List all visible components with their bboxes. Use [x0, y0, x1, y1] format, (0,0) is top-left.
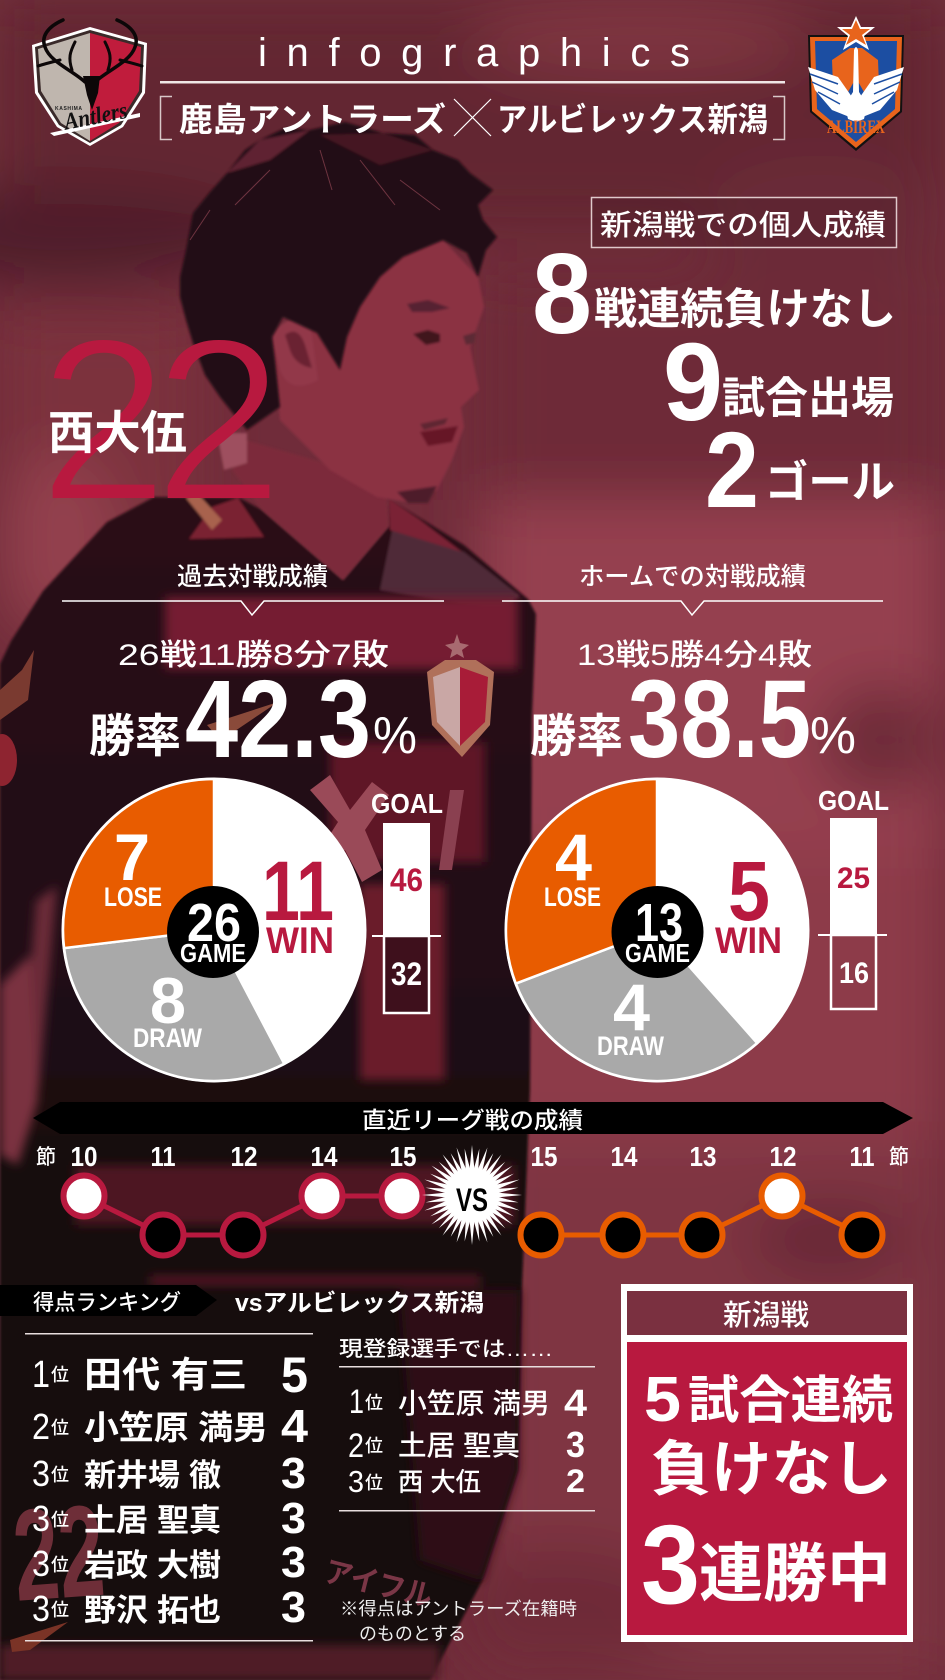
goal bar: all-time: [371, 788, 443, 1013]
row 2: 2: [348, 1427, 364, 1465]
player photo: [0, 122, 536, 1680]
row 1: 1: [32, 1354, 50, 1396]
match-up brackets: [160, 96, 784, 140]
footnote: のものとする: [359, 1624, 466, 1644]
panel: home record: [502, 563, 889, 1081]
neck: [217, 433, 389, 580]
timeline: Niigata recent results: 14: [610, 1141, 638, 1172]
panel: all-time record: [62, 563, 444, 1081]
antlers: [38, 20, 142, 82]
row 1: 田代 有三: [84, 1354, 247, 1395]
row 5: 岩政 大樹: [84, 1548, 221, 1583]
pie chart: home: 13: [635, 893, 683, 953]
jersey and shorts silhouette: [0, 494, 536, 1680]
row 6: 位: [51, 1600, 69, 1620]
face: [272, 240, 484, 503]
pie chart: home: LOSE: [544, 882, 601, 912]
row 3: 西 大伍: [398, 1467, 481, 1497]
pie chart: all-time: 7: [114, 820, 150, 894]
pie chart: all-time: GAME: [180, 938, 246, 968]
crest: Kashima Antlers: KASHIMA: [55, 106, 82, 112]
goal bar: all-time: 46: [390, 862, 423, 898]
personal record panel: 9: [663, 321, 723, 444]
panel: all-time record: %: [373, 707, 417, 765]
row 2: 3: [566, 1424, 585, 1465]
table: all-time scorers: [25, 1333, 313, 1642]
crest: Albirex Niigata: [808, 16, 904, 151]
callout: Niigata match streak: 新潟戦: [723, 1299, 809, 1332]
player number and name: [50, 340, 270, 498]
row 6: 3: [32, 1588, 50, 1629]
timeline: Kashima recent results: 14: [310, 1141, 338, 1172]
shorts print: アイフル: [321, 1555, 436, 1614]
row 3: [32, 1449, 306, 1498]
footnote: ※得点はアントラーズ在籍時: [340, 1599, 577, 1619]
goal bar: home: GOAL: [818, 785, 889, 816]
pie chart: all-time: 26: [187, 893, 241, 953]
pie chart: home: 4: [613, 970, 650, 1044]
row 1: 位: [51, 1365, 69, 1385]
panel: home record: 13戦5勝4分4敗: [577, 639, 812, 672]
callout: Niigata match streak: 連勝中: [699, 1538, 891, 1610]
row 5: 3: [281, 1538, 306, 1587]
personal record panel: 2: [705, 409, 759, 530]
row 2: 土居 聖真: [398, 1430, 520, 1461]
row 3: 3: [348, 1464, 364, 1499]
row 5: [32, 1538, 306, 1587]
row 3: 3: [32, 1453, 50, 1494]
timeline: Niigata recent results: 12: [770, 1141, 796, 1172]
goal bar: home: 16: [839, 957, 869, 990]
goal bar: all-time: GOAL: [371, 788, 443, 819]
timeline: Niigata recent results: 節: [889, 1146, 909, 1169]
footnote: [340, 1599, 577, 1644]
icon: VS burst: VS: [456, 1182, 488, 1218]
jersey stripes: [0, 597, 520, 1680]
timeline: Kashima recent results: 10: [70, 1141, 98, 1172]
timeline: Kashima recent results: 15: [390, 1141, 416, 1172]
row 1: [32, 1347, 308, 1403]
banner: recent league results: [33, 1102, 913, 1134]
timeline: Niigata recent results: 13: [690, 1141, 716, 1172]
table: current squad scorers: [339, 1338, 595, 1512]
panel: all-time record: 過去対戦成績: [177, 563, 328, 591]
personal record panel: 戦連続負けなし: [594, 286, 896, 334]
pie chart: home: [506, 779, 808, 1081]
callout: Niigata match streak: 試合連続: [688, 1372, 893, 1429]
heading: scoring ranking: 得点ランキング: [33, 1290, 181, 1315]
row 6: 野沢 拓也: [84, 1593, 221, 1628]
callout: Niigata match streak: 3: [641, 1502, 700, 1627]
pie chart: home: 4: [555, 820, 592, 894]
personal record panel: 8: [532, 231, 592, 358]
row 1: [349, 1383, 587, 1425]
row 4: 位: [51, 1510, 69, 1530]
row 1: 5: [281, 1347, 308, 1403]
row 6: 3: [281, 1583, 306, 1632]
panel: home record: 38.5: [628, 658, 811, 781]
row 3: 位: [51, 1465, 69, 1485]
panel: all-time record: 勝率: [89, 710, 181, 762]
timeline: Niigata recent results: 11: [850, 1141, 874, 1172]
personal record panel: 新潟戦での個人成績: [600, 209, 886, 242]
panel: home record: ホームでの対戦成績: [579, 563, 806, 591]
club crest on jersey: [427, 634, 494, 757]
callout: Niigata match streak: [621, 1284, 913, 1642]
panel: home record: 勝率: [530, 710, 623, 762]
row 2: 小笠原 満男: [84, 1409, 268, 1446]
timeline: Kashima recent results: 12: [230, 1141, 258, 1172]
player number and name: 22: [39, 291, 283, 550]
row 3: 3: [281, 1449, 306, 1498]
row 4: 3: [281, 1494, 306, 1543]
hair highlights: [190, 150, 440, 240]
heading: scoring ranking: [0, 1285, 484, 1317]
icon: VS burst: [422, 1145, 522, 1245]
header title: アルビレックス新潟: [497, 101, 768, 138]
row 3: [348, 1463, 585, 1499]
row 1: 小笠原 満男: [398, 1388, 550, 1419]
personal record panel: 試合出場: [722, 375, 894, 423]
personal record panel: ゴール: [765, 458, 895, 507]
player number and name: 西大伍: [48, 407, 187, 459]
hair: [180, 122, 497, 430]
row 3: 位: [365, 1473, 383, 1493]
pie chart: all-time: DRAW: [133, 1023, 202, 1053]
pie chart: home: 5: [728, 844, 770, 938]
goal bar: home: 25: [837, 862, 870, 895]
timeline: Niigata recent results: 15: [530, 1141, 558, 1172]
timeline: Kashima recent results: 節: [36, 1146, 56, 1169]
row 2: 位: [51, 1418, 69, 1438]
header title: 鹿島アントラーズ: [179, 101, 446, 138]
goal bar: all-time: 32: [391, 956, 422, 992]
pie chart: home: DRAW: [597, 1031, 664, 1061]
personal record panel: [532, 198, 896, 530]
goal bar: home: [818, 785, 889, 1009]
header title: infographics: [258, 31, 690, 75]
heading: scoring ranking: vsアルビレックス新潟: [235, 1290, 484, 1317]
jersey lettering: [207, 702, 464, 882]
pie chart: home: WIN: [715, 920, 782, 961]
pie chart: all-time: WIN: [266, 920, 334, 961]
row 1: 位: [365, 1393, 383, 1413]
callout: Niigata match streak: 負けなし: [651, 1436, 892, 1503]
pie chart: all-time: LOSE: [104, 882, 162, 912]
row 3: 新井場 徹: [84, 1458, 221, 1493]
panel: all-time record: 42.3: [185, 658, 371, 781]
row 4: [32, 1494, 306, 1543]
header title: [160, 31, 785, 140]
row 2: 位: [365, 1436, 383, 1456]
timeline: Kashima recent results: [36, 1141, 422, 1256]
panel: all-time record: 26戦11勝8分7敗: [118, 639, 389, 672]
row 3: 2: [566, 1463, 585, 1499]
panel: home record: %: [810, 707, 856, 765]
row 1: 4: [564, 1383, 587, 1425]
pie chart: all-time: 11: [262, 844, 334, 938]
pie chart: all-time: [63, 779, 365, 1081]
crest: Kashima Antlers: [32, 20, 147, 146]
shorts print: 22: [9, 1477, 109, 1629]
timeline: Niigata recent results: [520, 1141, 909, 1256]
row 1: 1: [349, 1383, 364, 1421]
crest: Kashima Antlers: Antlers: [60, 98, 130, 136]
row 2: 2: [32, 1406, 50, 1447]
row 4: 3: [32, 1498, 50, 1539]
timeline: Kashima recent results: 11: [150, 1141, 176, 1172]
table: current squad scorers: 現登録選手では……: [339, 1338, 553, 1361]
row 5: 3: [32, 1543, 50, 1584]
banner: recent league results: 直近リーグ戦の成績: [362, 1107, 583, 1133]
row 5: 位: [51, 1555, 69, 1575]
pie chart: all-time: 8: [150, 964, 186, 1037]
row 2: [348, 1424, 585, 1465]
row 2: [32, 1400, 308, 1452]
callout: Niigata match streak: 5: [644, 1363, 681, 1435]
pie chart: home: GAME: [625, 938, 690, 968]
row 6: [32, 1583, 306, 1632]
sleeve patches: [0, 650, 34, 786]
shorts print: [9, 1477, 436, 1652]
row 2: 4: [281, 1400, 308, 1452]
crest: Albirex Niigata: ALBIREX: [827, 117, 885, 138]
row 4: 土居 聖真: [84, 1503, 221, 1538]
